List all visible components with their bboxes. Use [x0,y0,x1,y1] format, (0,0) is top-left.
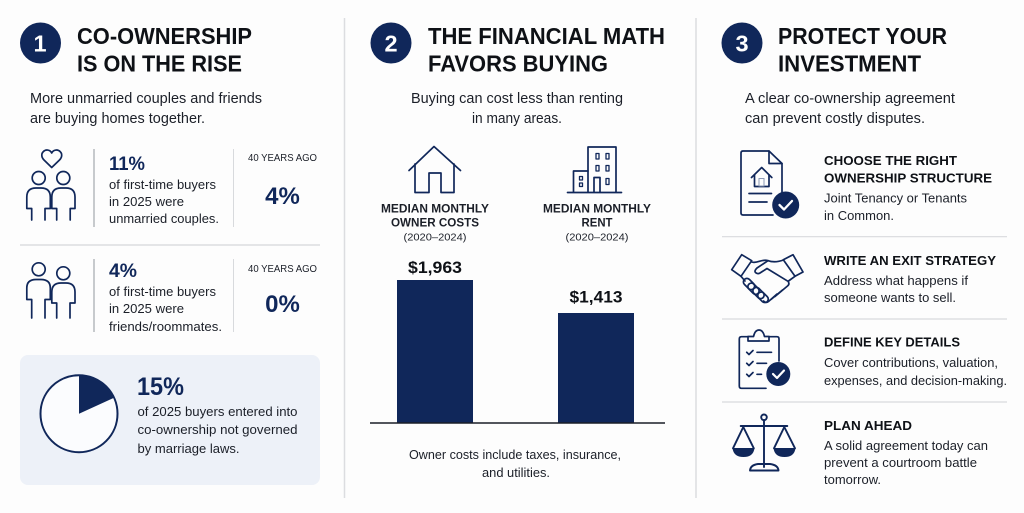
label: rent: MEDIAN MONTHLY [543,204,651,216]
label: rent: RENT [582,218,612,230]
icon: scales of justice [732,414,796,470]
panel: co-ownership is on the rise [20,22,320,485]
item: choose the right ownership structure: Joint Tenancy or Tenants [824,192,967,206]
callout text: 15% [137,373,184,401]
callout text: by marriage laws. [138,442,240,456]
stat: 4% friends or roommates: 4% [109,261,137,282]
bar chart: owner costs vs rent [370,258,665,423]
icon: clipboard checklist [739,330,790,388]
heading: co-ownership: IS ON THE RISE [77,50,242,76]
badge: number 1: 1 [33,30,47,56]
icon: couple with heart [27,150,75,220]
intro text [411,91,623,127]
stat: 4% friends or roommates [109,261,222,334]
heading: financial math: THE FINANCIAL MATH [428,23,665,49]
item: choose the right ownership structure: OWNERSHIP STRUCTURE [824,171,992,186]
panel: the financial math favors buying [370,22,665,480]
item: plan ahead: A solid agreement today can [824,439,988,453]
item: choose the right ownership structure: in Common. [824,209,894,223]
badge: number 1 [20,22,61,64]
intro text: More unmarried couples and friends [30,91,262,107]
item: choose the right ownership structure [824,153,992,223]
badge: number 2 [370,22,412,64]
intro text: in many areas. [472,111,562,127]
icon: house [409,146,460,192]
item: plan ahead: PLAN AHEAD [824,418,912,433]
intro text [745,91,955,127]
footnote [409,448,621,480]
footnote: Owner costs include taxes, insurance, [409,448,621,462]
item: write an exit strategy: someone wants to sell. [824,291,956,305]
icon: document with check [741,151,799,218]
heading: financial math [428,23,665,76]
stat: 40 years ago 4%: 4% [265,183,300,210]
label: owner costs: OWNER COSTS [391,218,479,230]
stat: 4% friends or roommates: friends/roommates. [109,320,222,334]
bar: rent $1,413 [558,288,634,423]
stat: 11% unmarried couples: 11% [109,154,145,175]
icon: handshake [732,255,803,304]
item: plan ahead [824,418,988,487]
item: plan ahead: tomorrow. [824,473,881,487]
item: write an exit strategy [824,253,996,305]
bar: rent $1,413: $1,413 [570,288,622,307]
heading: protect your investment: PROTECT YOUR [778,23,947,49]
bar: owner costs $1,963: $1,963 [408,258,462,277]
intro text: A clear co-ownership agreement [745,91,955,107]
stat: 40 years ago 0%: 40 YEARS AGO [248,264,317,275]
callout: 15% of buyers [20,355,320,485]
stat: 11% unmarried couples: unmarried couples. [109,212,219,226]
stat: 40 years ago 0%: 0% [265,291,300,318]
callout text [137,373,298,456]
intro text: can prevent costly disputes. [745,111,925,127]
stat: 40 years ago 4%: 40 YEARS AGO [248,153,317,164]
stat: 11% unmarried couples: of first-time buyers [109,178,216,192]
heading: co-ownership [77,23,252,76]
label: owner costs: (2020–2024) [404,232,466,244]
intro text: are buying homes together. [30,111,205,127]
item: define key details: DEFINE KEY DETAILS [824,335,960,350]
stat: 11% unmarried couples [109,154,219,226]
badge: number 3: 3 [735,30,749,56]
badge: number 3 [722,22,762,64]
label: rent: (2020–2024) [566,232,628,244]
item: choose the right ownership structure: CHOOSE THE RIGHT [824,153,957,168]
stat: 4% friends or roommates: in 2025 were [109,302,184,316]
item: plan ahead: prevent a courtroom battle [824,456,977,470]
icon: apartment building [568,147,622,192]
item: define key details: expenses, and decision-making. [824,374,1007,388]
heading: protect your investment: INVESTMENT [778,50,921,76]
label: owner costs [381,204,489,244]
stat: 11% unmarried couples: in 2025 were [109,195,184,209]
intro text [30,91,262,127]
item: define key details: Cover contributions, valuation, [824,356,998,370]
icon: two friends [27,263,75,318]
callout text: of 2025 buyers entered into [138,405,298,419]
stat: 40 years ago 4% [248,153,317,210]
callout text: co-ownership not governed [138,423,298,437]
footnote: and utilities. [482,466,550,480]
label: rent [543,204,651,244]
heading: financial math: FAVORS BUYING [428,50,608,76]
item: write an exit strategy: Address what happens if [824,274,969,288]
stat: 4% friends or roommates: of first-time buyers [109,285,216,299]
badge: number 2: 2 [384,30,398,56]
intro text: Buying can cost less than renting [411,91,623,107]
bar: owner costs $1,963 [397,258,473,423]
heading: co-ownership: CO-OWNERSHIP [77,23,252,49]
pie chart: 15% [40,375,118,452]
label: owner costs: MEDIAN MONTHLY [381,204,489,216]
stat: 40 years ago 0% [248,264,317,318]
item: write an exit strategy: WRITE AN EXIT STRATEGY [824,253,996,268]
panel: protect your investment [722,22,1007,487]
item: define key details [824,335,1007,388]
heading: protect your investment [778,23,947,76]
